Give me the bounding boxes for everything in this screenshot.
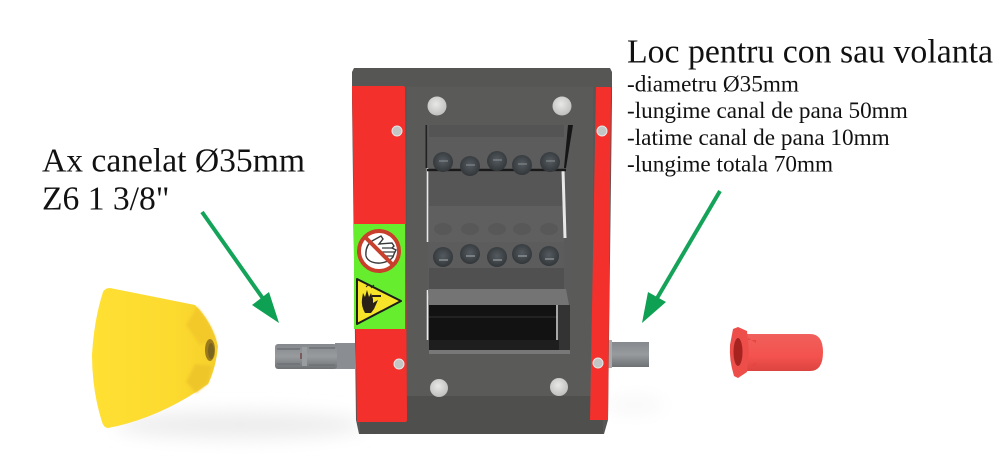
icon: no hands sign bbox=[359, 231, 399, 271]
heading: splined shaft: Ax canelat Ø35mm bbox=[42, 142, 305, 180]
frame bbox=[352, 68, 612, 434]
text block: hub seat specs: -lungime totala 70mm bbox=[627, 152, 833, 178]
lower row of rotor knives bbox=[433, 244, 559, 267]
lower lip bbox=[428, 289, 569, 305]
large plate bolts bbox=[428, 96, 572, 397]
icon: red sleeve bbox=[730, 327, 823, 378]
arrow: to plain shaft bbox=[642, 191, 720, 323]
light edges bbox=[426, 168, 428, 340]
icon: yellow cone bbox=[92, 288, 218, 428]
heading: splined shaft: Z6 1 3/8" bbox=[42, 180, 170, 218]
text block: hub seat specs: -lungime canal de pana 50mm bbox=[627, 98, 908, 124]
heading: splined shaft bbox=[42, 142, 305, 218]
inner plate bbox=[407, 87, 593, 396]
chute opening bbox=[426, 125, 573, 354]
ghost knives bbox=[434, 223, 558, 235]
heading: hub seat: Loc pentru con sau volanta bbox=[627, 34, 993, 70]
panel: left red guard bbox=[352, 86, 407, 422]
right plain shaft bbox=[607, 340, 649, 368]
left splined shaft bbox=[275, 343, 355, 369]
icon: hand hazard triangle bbox=[357, 279, 401, 324]
ground shadow bbox=[115, 397, 665, 438]
panel: green warning label bbox=[354, 224, 405, 329]
text block: hub seat specs: -latime canal de pana 10mm bbox=[627, 125, 890, 151]
text block: hub seat specs bbox=[627, 72, 908, 178]
arrow: to splined shaft bbox=[202, 212, 279, 323]
panel: right red guard bbox=[590, 87, 611, 420]
upper row of rotor knives bbox=[433, 151, 560, 176]
text block: hub seat specs: -diametru Ø35mm bbox=[627, 72, 799, 98]
machine body bbox=[352, 68, 612, 434]
dark roller bbox=[429, 305, 570, 350]
lower base band bbox=[360, 396, 603, 434]
small guard screws bbox=[392, 126, 607, 369]
dark edge right bbox=[564, 125, 573, 168]
